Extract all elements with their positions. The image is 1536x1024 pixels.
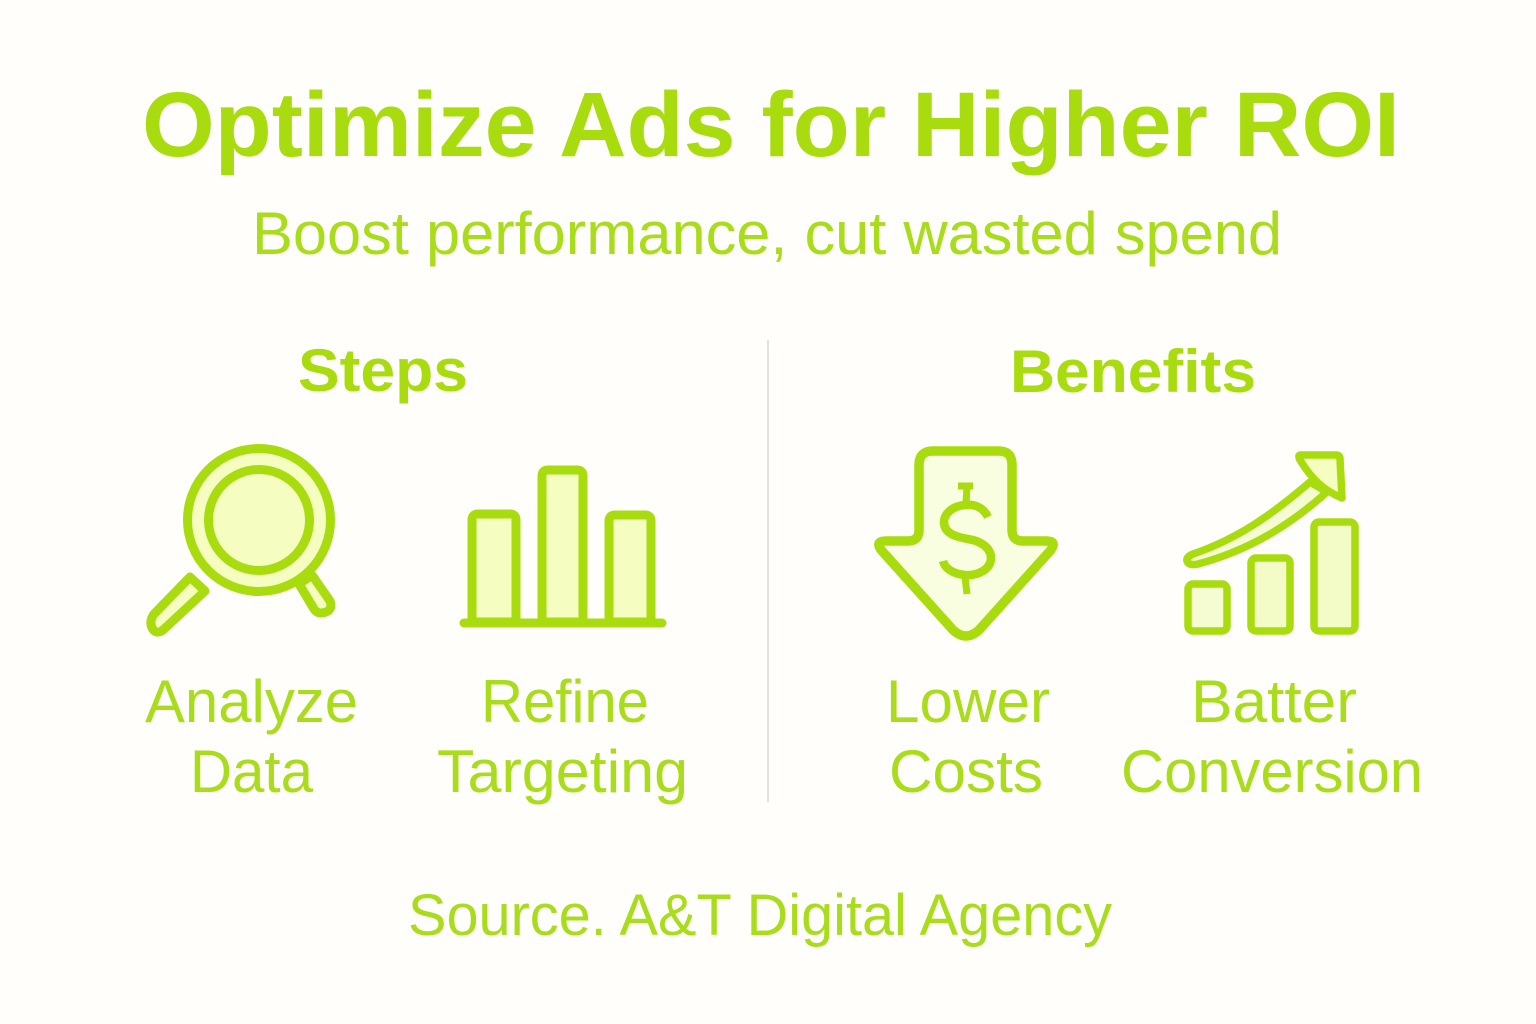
icon: down arrow with dollar: [879, 451, 1053, 636]
label: analyze data: Data: [190, 738, 314, 805]
label: analyze data: [145, 668, 358, 805]
label: batter conversion: Conversion: [1121, 738, 1423, 805]
label: lower costs: [886, 668, 1050, 805]
icon: magnifying glass: [151, 448, 331, 632]
source note: Source. A&T Digital Agency: [408, 883, 1112, 948]
heading: benefits: Benefits: [1010, 338, 1256, 405]
label: lower costs: Lower: [886, 668, 1050, 735]
title: Optimize Ads for Higher ROI: [142, 74, 1400, 176]
label: analyze data: Analyze: [145, 668, 358, 735]
label: lower costs: Costs: [889, 738, 1043, 805]
icon: growth chart with arrow: [1187, 455, 1355, 631]
label: refine targeting: Targeting: [437, 738, 688, 805]
subtitle: Boost performance, cut wasted spend: [252, 200, 1282, 267]
label: batter conversion: [1121, 668, 1423, 805]
label: refine targeting: Refine: [481, 668, 649, 735]
label: batter conversion: Batter: [1191, 668, 1357, 735]
heading: steps: Steps: [298, 337, 468, 404]
label: refine targeting: [437, 668, 688, 805]
icon: bar chart: [464, 470, 662, 623]
